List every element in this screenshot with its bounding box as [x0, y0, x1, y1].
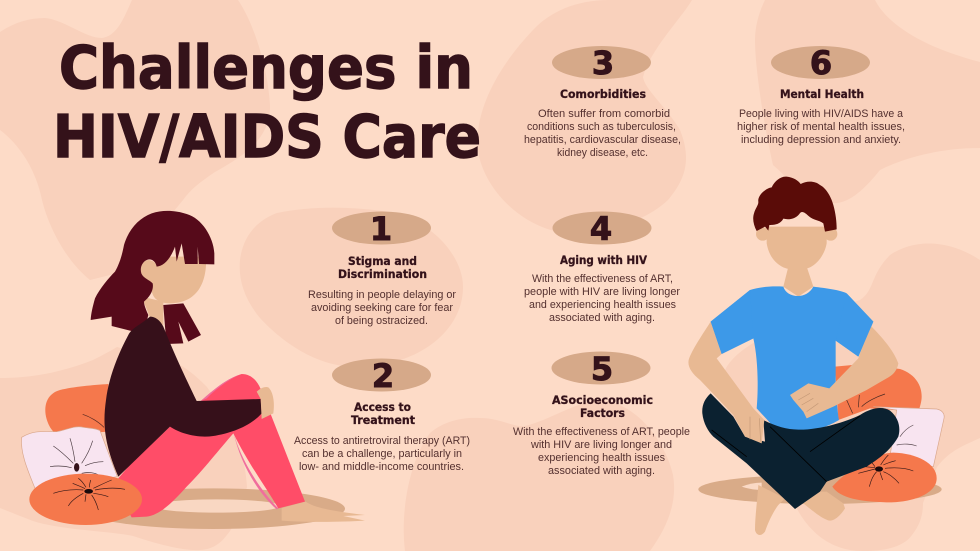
item 3: comorbidities: kidney disease, etc. [557, 147, 648, 159]
item 5: socioeconomic factors: experiencing health issues [538, 452, 665, 464]
item 5: socioeconomic factors: Factors [580, 406, 625, 420]
item 4: aging with HIV: associated with aging. [549, 312, 655, 324]
title [53, 33, 481, 171]
item 5: socioeconomic factors: 5 [591, 350, 613, 388]
item 2: access to treatment: Treatment [351, 413, 415, 427]
item 5: socioeconomic factors: With the effectiveness of ART, people [513, 426, 690, 438]
item 2: access to treatment [294, 357, 470, 473]
item 6: mental health: higher risk of mental health issues, [737, 121, 905, 133]
item 2: access to treatment: Access to antiretroviral therapy (ART) [294, 435, 470, 447]
item 3: comorbidities: conditions such as tuberculosis, [527, 121, 676, 133]
item 1: stigma and discrimination: Resulting in people delaying or [308, 289, 456, 301]
illustration: seated man with cushions [688, 177, 944, 535]
title: Challenges in [59, 33, 473, 102]
item 5: socioeconomic factors: ASocioeconomic [552, 393, 653, 407]
item 5: socioeconomic factors [513, 350, 690, 477]
item 6: mental health: People living with HIV/AIDS have a [739, 108, 904, 120]
item 3: comorbidities: Comorbidities [560, 87, 646, 101]
item 4: aging with HIV: people with HIV are living longer [524, 286, 680, 298]
title: HIV/AIDS Care [53, 102, 481, 171]
item 5: socioeconomic factors: associated with aging. [548, 465, 655, 477]
item 2: access to treatment: 2 [372, 357, 394, 395]
item 2: access to treatment: Access to [354, 400, 411, 414]
item 4: aging with HIV: and experiencing health issues [529, 299, 676, 311]
item 3: comorbidities: hepatitis, cardiovascular disease, [524, 134, 681, 146]
item 1: stigma and discrimination: avoiding seeking care for fear [311, 302, 453, 314]
item 1: stigma and discrimination: Discrimination [338, 267, 427, 281]
item 6: mental health: including depression and anxiety. [741, 134, 901, 146]
item 1: stigma and discrimination: of being ostracized. [335, 315, 428, 327]
item 6: mental health [737, 44, 905, 146]
item 4: aging with HIV: 4 [590, 210, 612, 248]
item 6: mental health: Mental Health [780, 87, 864, 101]
item 4: aging with HIV [524, 210, 680, 324]
item 6: mental health: 6 [810, 44, 832, 82]
item 2: access to treatment: can be a challenge, particularly in [302, 448, 462, 460]
item 4: aging with HIV: Aging with HIV [560, 253, 647, 267]
item 5: socioeconomic factors: with HIV are living longer and [530, 439, 672, 451]
item 1: stigma and discrimination [308, 210, 456, 327]
illustration: seated woman with cushions [21, 211, 365, 529]
item 1: stigma and discrimination: 1 [370, 210, 392, 248]
item 2: access to treatment: low- and middle-income countries. [299, 461, 464, 473]
item 3: comorbidities: 3 [592, 44, 614, 82]
item 1: stigma and discrimination: Stigma and [348, 254, 417, 268]
item 4: aging with HIV: With the effectiveness of ART, [532, 273, 673, 285]
item 3: comorbidities: Often suffer from comorbid [538, 108, 670, 120]
item 3: comorbidities [524, 44, 681, 159]
